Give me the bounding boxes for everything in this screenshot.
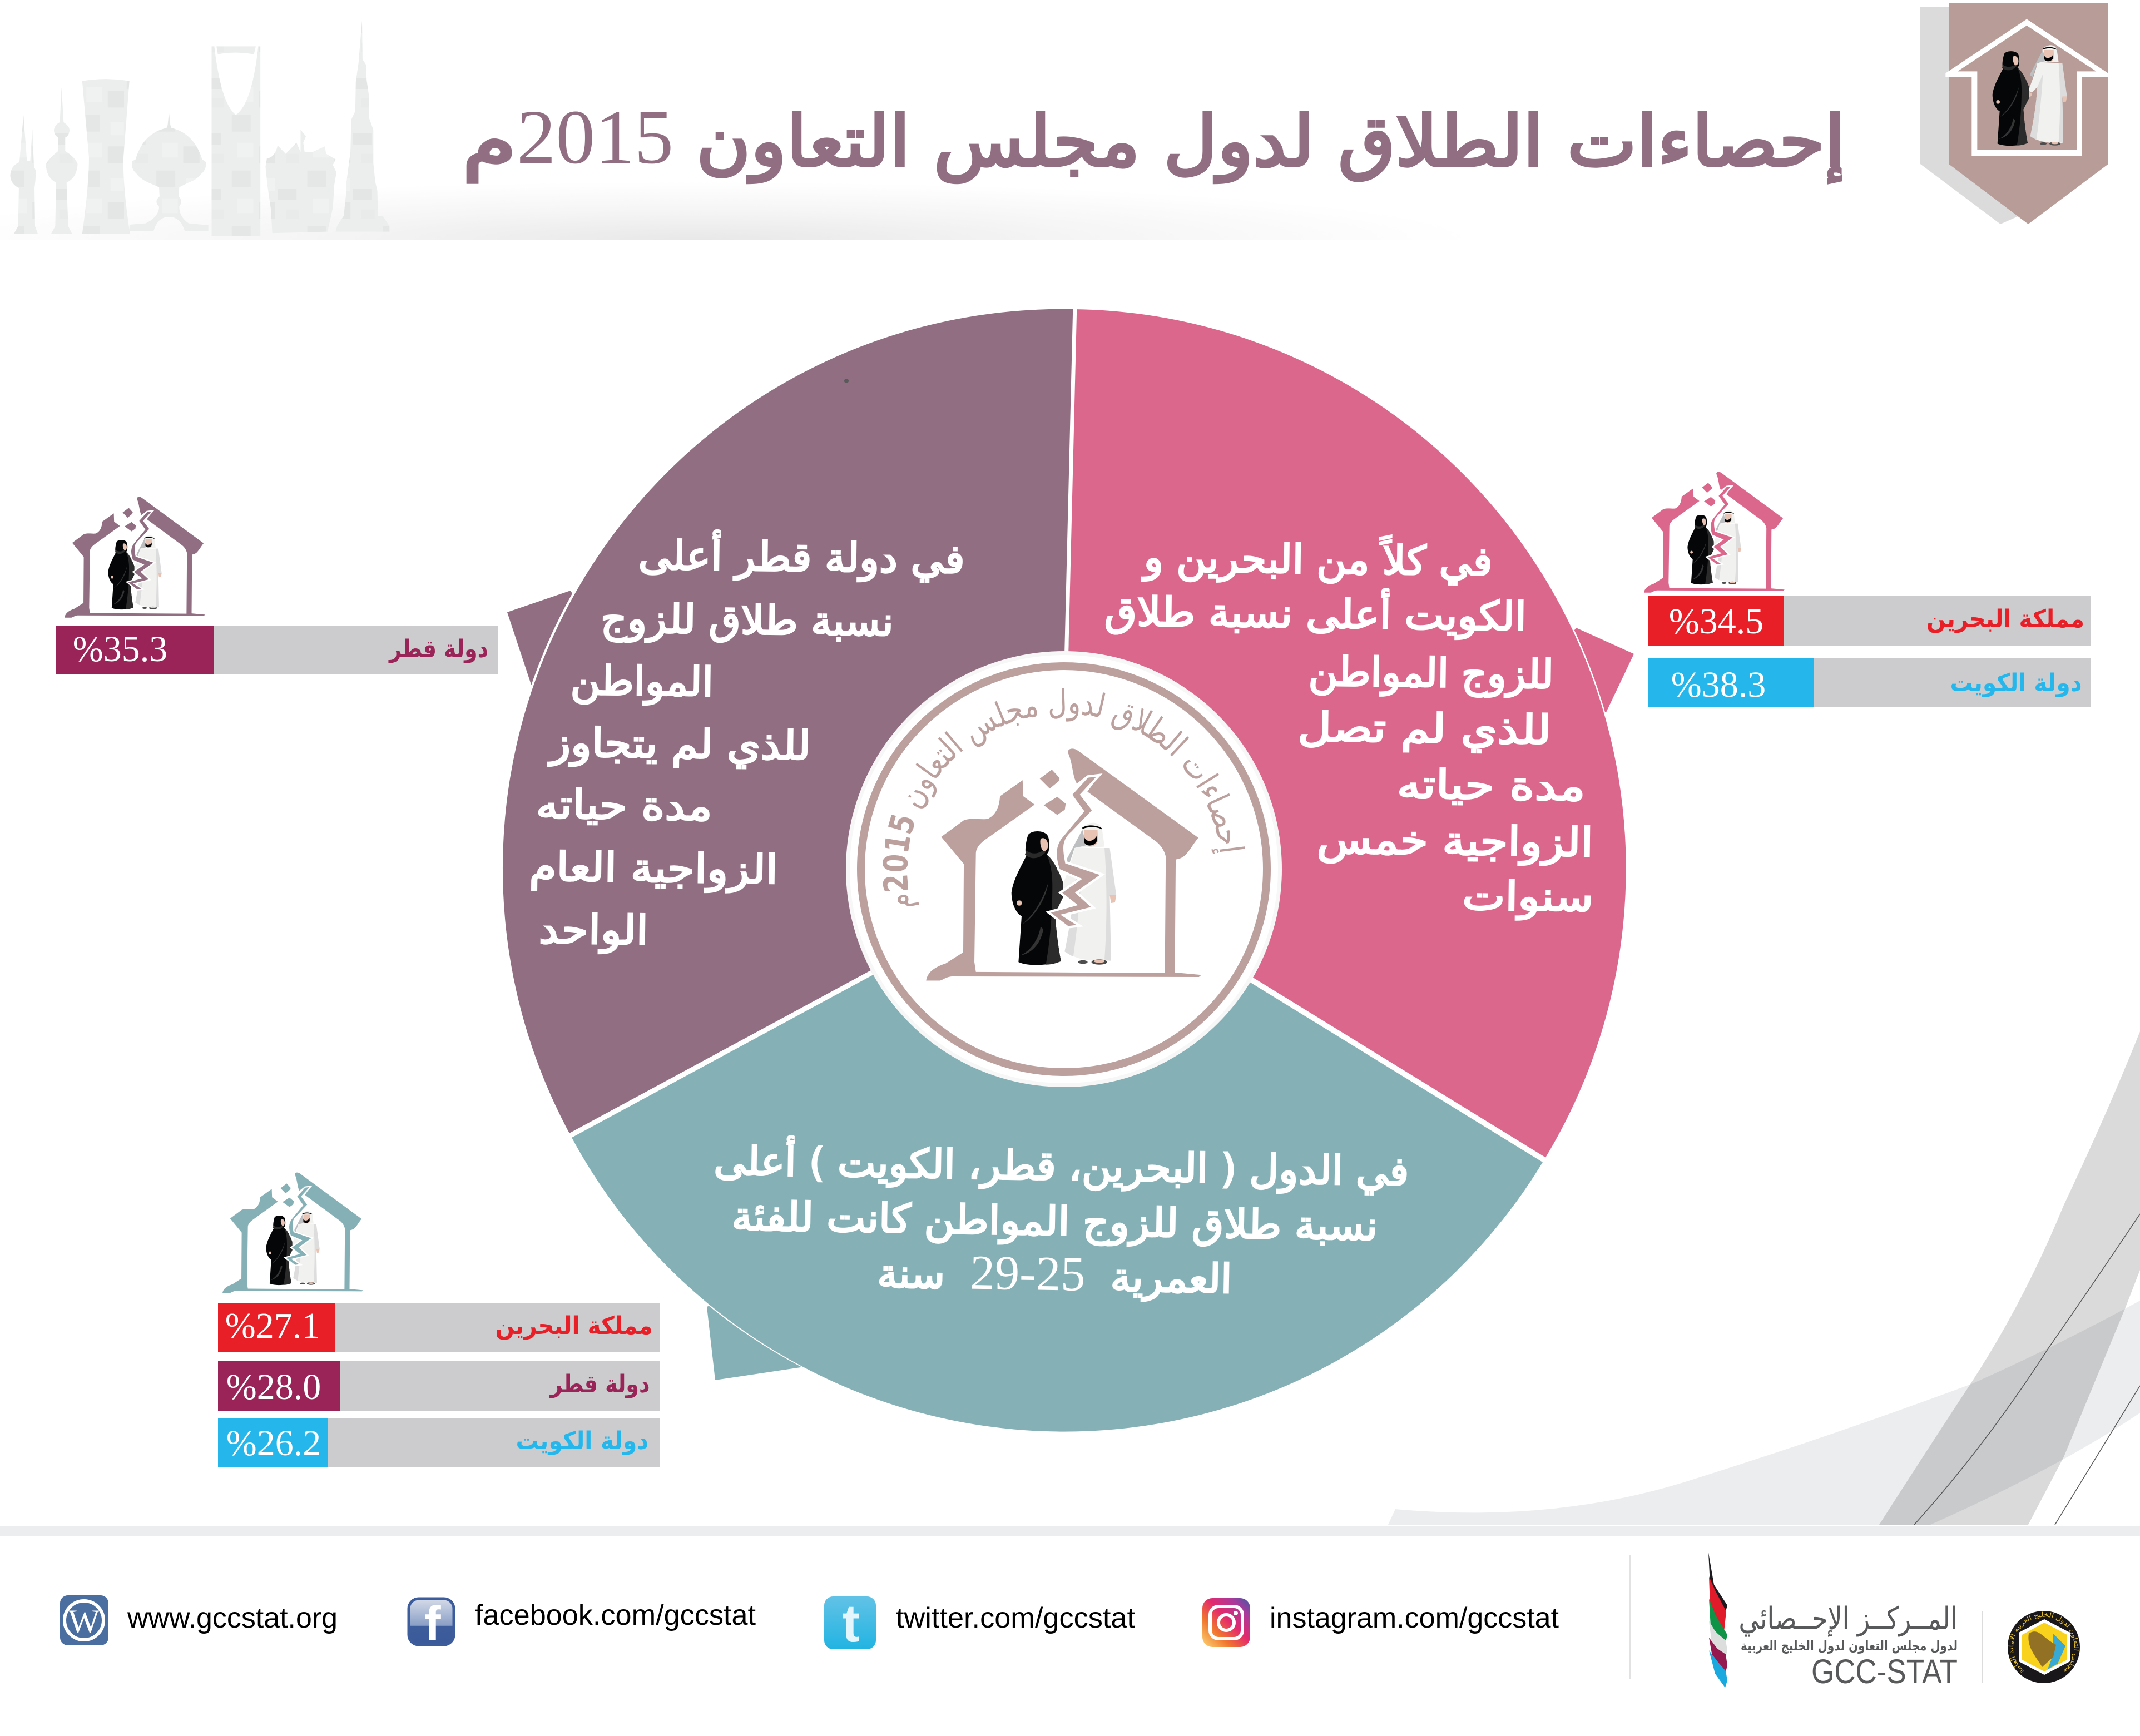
icon: wordpress: W	[68, 1603, 100, 1640]
sector dividers	[568, 303, 1546, 1161]
panel: Qatar sector: نسبة طلاق للزوج	[600, 595, 894, 646]
panel: Qatar sector: للذي لم يتجاوز	[548, 719, 811, 770]
panel: Bahrain and Kuwait sector: مدة حياته	[1396, 761, 1586, 810]
bar: Qatar 35.3	[56, 626, 498, 674]
title: م	[462, 101, 517, 182]
icon: facebook: f	[424, 1596, 441, 1651]
icon: broken house Qatar	[65, 497, 205, 618]
icon: twitter	[824, 1594, 876, 1653]
footer separator	[1629, 1555, 1631, 1679]
panel: Bahrain and Kuwait sector: سنوات	[1462, 872, 1594, 921]
icon: instagram	[1202, 1598, 1250, 1647]
background swoosh shapes	[1388, 1031, 2140, 1525]
icon: broken house age group	[222, 1173, 363, 1293]
pie outline ring	[501, 305, 1627, 1432]
panel: age group sector: في الدول ( البحرين، قطر، الكويت ) أعلى	[714, 1134, 1409, 1196]
bar: Kuwait 26.2: %26.2	[226, 1423, 321, 1464]
icon: twitter: t	[842, 1594, 860, 1653]
panel: age group sector	[571, 869, 1544, 1432]
panel: Qatar sector: مدة حياته	[536, 781, 712, 830]
panel: age group sector: العمرية 25-29 سنة	[877, 1244, 1232, 1304]
panel: Qatar sector: في دولة قطر أعلى	[638, 529, 965, 583]
logo: GCC-STAT wordmark: لدول مجلس التعاون لدول الخليج العربية	[1741, 1638, 1958, 1654]
bar: Qatar 28.0	[218, 1361, 660, 1411]
bar: Kuwait 26.2	[218, 1418, 660, 1467]
center emblem	[846, 651, 1282, 1087]
panel: Bahrain and Kuwait sector: للزوج المواطن	[1308, 648, 1554, 698]
bar: Kuwait 38.3	[1648, 658, 2091, 707]
bar: Kuwait 38.3: دولة الكويت	[1950, 669, 2082, 697]
icon: shield badge with couple in house	[1920, 3, 2108, 224]
instagram link: instagram.com/gccstat	[1270, 1602, 1559, 1634]
icon: facebook	[409, 1596, 454, 1651]
bar: Qatar 28.0: %28.0	[226, 1367, 321, 1407]
logo: GCC-STAT wordmark: GCC-STAT	[1811, 1653, 1958, 1690]
icon: broken house with couple	[926, 748, 1201, 981]
twitter link: twitter.com/gccstat	[896, 1602, 1136, 1634]
panel: Qatar sector: الواحد	[538, 906, 648, 954]
icon: wordpress	[60, 1595, 108, 1645]
footer band	[0, 1526, 2140, 1536]
bar: Bahrain 34.5	[1648, 596, 2091, 646]
title: 2015	[517, 95, 673, 180]
skyline of gulf landmarks	[10, 21, 389, 236]
bar: Qatar 35.3: %35.3	[73, 629, 167, 669]
website link: www.gccstat.org	[127, 1602, 338, 1634]
bar: Kuwait 38.3: %38.3	[1671, 664, 1766, 705]
bar: Bahrain 34.5: مملكة البحرين	[1926, 605, 2084, 633]
panel: Qatar sector: الزواجية العام	[529, 843, 778, 894]
panel: age group sector: نسبة طلاق للزوج المواطن كانت للفئة	[731, 1193, 1378, 1250]
panel: Qatar sector: المواطن	[570, 657, 714, 706]
logo: GCC-STAT wordmark	[1738, 1601, 1958, 1690]
logo: GCC emblem: مجلس التعاون لدول الخليج العربية الأمانة العامة	[2008, 1611, 2080, 1673]
panel: Bahrain and Kuwait sector: الزواجية خمس	[1316, 816, 1593, 866]
title: إحصاءات الطلاق لدول مجلس التعاون	[696, 101, 1845, 183]
icon: broken house Bahrain and Kuwait	[1644, 472, 1785, 593]
facebook link: facebook.com/gccstat	[475, 1599, 756, 1631]
panel: Bahrain and Kuwait sector: الكويت أعلى نسبة طلاق	[1104, 585, 1527, 641]
panel: Bahrain and Kuwait sector: في كلاً من البحرين و	[1142, 532, 1493, 586]
panel: tail pointer purple	[507, 591, 612, 690]
bar: Bahrain 27.1	[218, 1303, 660, 1352]
header background shadow	[0, 178, 1557, 240]
bar: Bahrain 27.1: مملكة البحرين	[495, 1312, 653, 1340]
curved heading: إحصاءات الطلاق لدول مجلس التعاون 2015 م	[883, 688, 1245, 906]
bar: Bahrain 34.5: %34.5	[1669, 601, 1763, 642]
panel: Bahrain and Kuwait sector	[1065, 309, 1626, 1159]
bar: Kuwait 26.2: دولة الكويت	[516, 1427, 648, 1455]
logo: GCC-STAT ribbon	[1708, 1553, 1727, 1688]
panel: tail pointer teal	[707, 1279, 834, 1380]
bar: Qatar 28.0: دولة قطر	[549, 1370, 650, 1398]
bar: Bahrain 27.1: %27.1	[225, 1306, 320, 1346]
logo: GCC-STAT wordmark: المــركــز الإحــصائي	[1738, 1601, 1958, 1637]
bar: Qatar 35.3: دولة قطر	[388, 635, 488, 663]
panel: Bahrain and Kuwait sector: للذي لم تصل	[1297, 703, 1552, 754]
panel: tail pointer pink	[1529, 628, 1634, 712]
panel: Qatar sector	[503, 309, 1074, 1135]
